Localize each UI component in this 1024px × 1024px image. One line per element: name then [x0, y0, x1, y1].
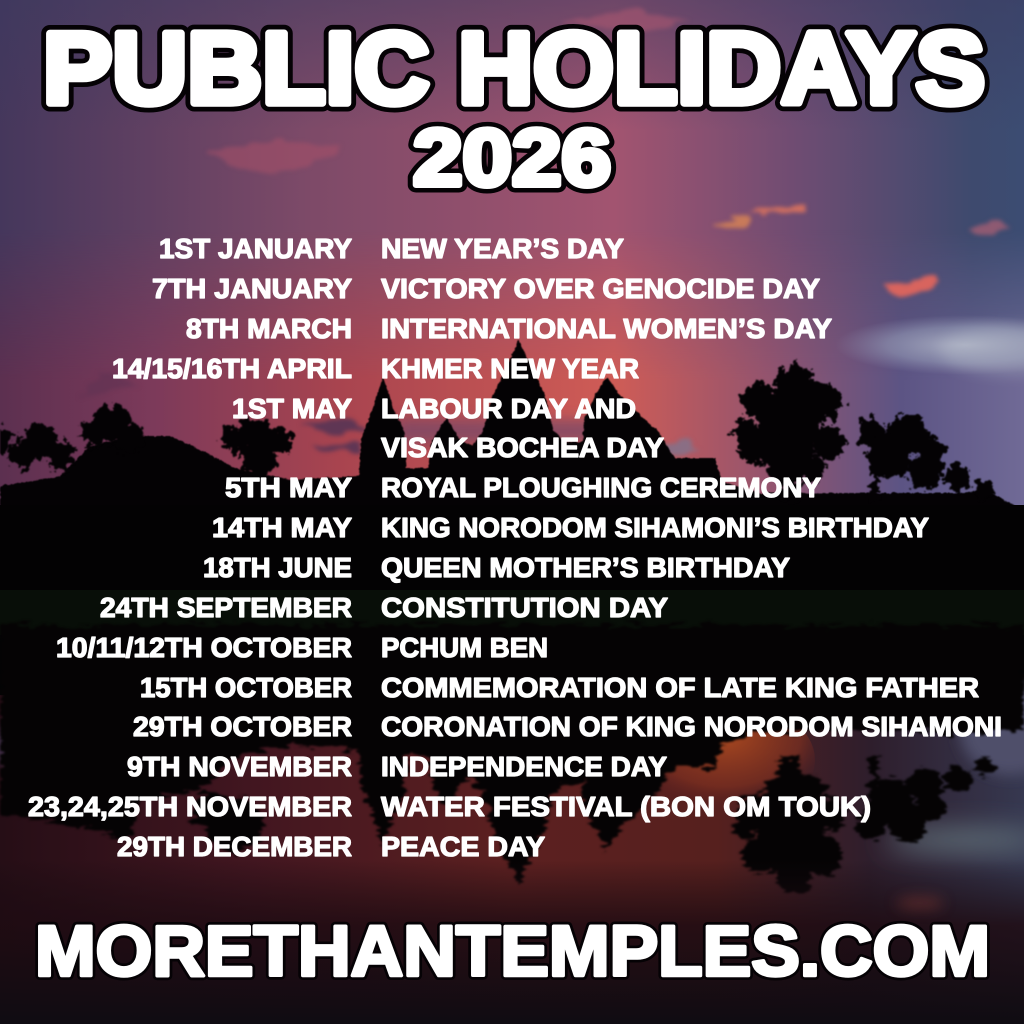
palm tree silhouettes — [0, 365, 995, 500]
row: Independence Day: 9TH NOVEMBER — [127, 751, 352, 782]
water reflection — [0, 625, 1024, 1024]
title: PUBLIC HOLIDAYS — [43, 13, 985, 125]
row: Peace Day: 29TH DECEMBER — [117, 831, 352, 862]
row: Visak Bochea Day: VISAK BOCHEA DAY — [381, 432, 664, 463]
row: Pchum Ben: PCHUM BEN — [381, 632, 548, 663]
row: Labour Day and: LABOUR DAY AND — [381, 393, 636, 424]
row: Victory Over Genocide Day — [152, 273, 820, 304]
row: Coronation of King Norodom Sihamoni: 29TH OCTOBER — [133, 711, 352, 742]
row: New Year's Day — [159, 233, 624, 264]
row: King Norodom Sihamoni's Birthday: 14TH MAY — [212, 512, 352, 543]
website footer: MORETHANTEMPLES.COM — [35, 912, 990, 992]
row: Constitution Day — [100, 592, 668, 623]
title: PUBLIC HOLIDAYS — [43, 13, 985, 125]
row: Peace Day: PEACE DAY — [381, 831, 545, 862]
website footer: MORETHANTEMPLES.COM — [35, 912, 990, 992]
row: Water Festival: WATER FESTIVAL (BON OM TOUK) — [381, 791, 871, 822]
row: Queen Mother's Birthday: QUEEN MOTHER’S BIRTHDAY — [381, 552, 790, 583]
row: Independence Day: INDEPENDENCE DAY — [381, 751, 667, 782]
subtitle year: 2026 — [413, 113, 611, 202]
row: New Year's Day: NEW YEAR’S DAY — [381, 233, 624, 264]
dark ground and lawn band — [0, 505, 1024, 700]
row: Khmer New Year: 14/15/16TH APRIL — [112, 353, 352, 384]
row: Water Festival — [28, 791, 871, 822]
row: Queen Mother's Birthday — [203, 552, 790, 583]
temple silhouette — [0, 340, 1024, 600]
row: Pchum Ben — [56, 632, 548, 663]
row: International Women's Day: INTERNATIONAL WOMEN’S DAY — [381, 313, 832, 344]
row: International Women's Day: 8TH MARCH — [186, 313, 352, 344]
holiday list — [28, 233, 1002, 862]
row: Commemoration of Late King Father: 15TH OCTOBER — [140, 672, 352, 703]
row: Victory Over Genocide Day: 7TH JANUARY — [152, 273, 352, 304]
row: Commemoration of Late King Father — [140, 672, 979, 703]
row: Khmer New Year: KHMER NEW YEAR — [381, 353, 639, 384]
row: International Women's Day — [186, 313, 832, 344]
row: Victory Over Genocide Day: VICTORY OVER GENOCIDE DAY — [381, 273, 820, 304]
row: Water Festival: 23,24,25TH NOVEMBER — [28, 791, 352, 822]
row: Coronation of King Norodom Sihamoni: CORONATION OF KING NORODOM SIHAMONI — [381, 711, 1002, 742]
subtitle year: 2026 — [413, 113, 611, 202]
row: Labour Day and: 1ST MAY — [232, 393, 352, 424]
row: Royal Ploughing Ceremony: ROYAL PLOUGHING CEREMONY — [381, 472, 821, 503]
row: Constitution Day: CONSTITUTION DAY — [381, 592, 668, 623]
row: Labour Day and — [232, 393, 636, 424]
row: King Norodom Sihamoni's Birthday: KING NORODOM SIHAMONI’S BIRTHDAY — [381, 512, 929, 543]
background: sunset sky over Angkor Wat — [0, 0, 1024, 560]
row: Pchum Ben: 10/11/12TH OCTOBER — [56, 632, 352, 663]
row: New Year's Day: 1ST JANUARY — [159, 233, 352, 264]
row: Royal Ploughing Ceremony: 5TH MAY — [225, 472, 352, 503]
row: Khmer New Year — [112, 353, 639, 384]
row: Coronation of King Norodom Sihamoni — [133, 711, 1002, 742]
row: Constitution Day: 24TH SEPTEMBER — [100, 592, 352, 623]
row: Peace Day — [117, 831, 545, 862]
row: Independence Day — [127, 751, 667, 782]
row: Queen Mother's Birthday: 18TH JUNE — [203, 552, 352, 583]
row: Commemoration of Late King Father: COMMEMORATION OF LATE KING FATHER — [381, 672, 979, 703]
